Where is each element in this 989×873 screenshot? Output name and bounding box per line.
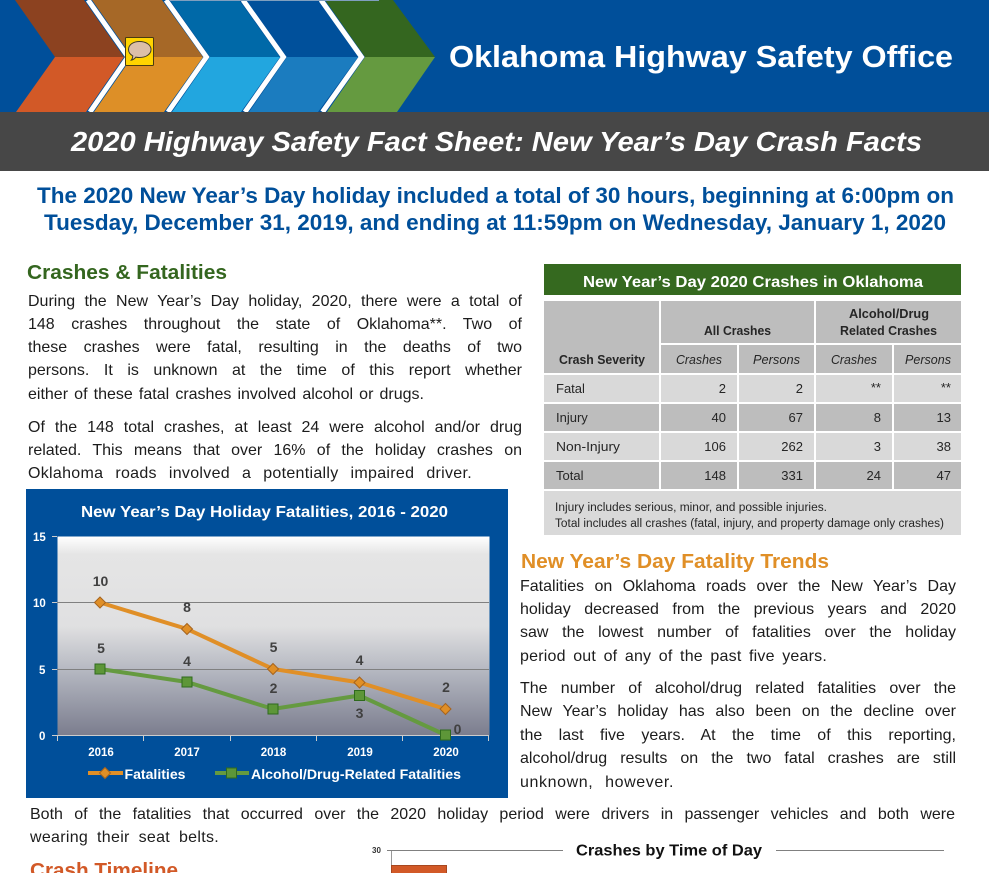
data labels: 8 <box>183 599 191 615</box>
text block: trends paragraph 1 <box>520 578 956 665</box>
header banner <box>0 0 989 112</box>
data labels: 5 <box>270 639 278 655</box>
text block: crashes paragraph 2: related. This means that over 16% of the holiday crashes on <box>28 442 522 459</box>
text block: crashes paragraph 2 <box>28 419 522 482</box>
row: injury: Injury <box>556 410 588 425</box>
subtitle: 2020 Highway Safety Fact Sheet: New Year’s Day Crash Facts <box>70 126 922 157</box>
chart title: Crashes by Time of Day <box>576 842 762 860</box>
text block: crashes paragraph 1: persons. It is unknown at the time of this report whether <box>28 362 522 379</box>
chart: crashes by time of day: 30 <box>372 846 381 855</box>
table footnote: Injury includes serious, minor, and possible injuries. <box>555 502 827 514</box>
subtitle bar <box>0 112 989 171</box>
table column headings <box>559 306 951 367</box>
x axis labels: 2018 <box>261 747 287 759</box>
banner title: Oklahoma Highway Safety Office <box>449 39 953 74</box>
row: injury: 13 <box>937 410 951 425</box>
legend: Fatalities <box>124 766 186 782</box>
panel: fatalities line chart <box>26 489 508 798</box>
text block: trends paragraph 1: Fatalities on Oklahoma roads over the New Year’s Day <box>520 578 956 595</box>
data labels: 5 <box>97 640 105 656</box>
text block: crashes paragraph 1: During the New Year’s Day holiday, 2020, there were a total of <box>28 293 522 310</box>
chevron 4: blue <box>247 0 358 112</box>
table title: New Year’s Day 2020 Crashes in Oklahoma <box>583 274 923 291</box>
table column headings: All Crashes <box>704 323 771 338</box>
table column headings: Related Crashes <box>840 323 937 338</box>
data labels: 4 <box>183 653 191 669</box>
data labels <box>93 573 462 737</box>
row: fatal: Fatal <box>556 381 585 396</box>
row: total: 24 <box>867 468 881 483</box>
chevron 3: cyan <box>170 0 280 112</box>
row: total <box>556 468 951 483</box>
table column headings: Crashes <box>831 352 877 367</box>
row: fatal: 2 <box>719 381 726 396</box>
table column headings: Alcohol/Drug <box>849 306 929 321</box>
x axis labels: 2016 <box>88 747 114 759</box>
row: fatal: ** <box>941 380 951 395</box>
y axis labels: 0 <box>39 731 45 743</box>
data labels: 2 <box>270 680 278 696</box>
chart title: New Year’s Day Holiday Fatalities, 2016 - 2020 <box>81 504 448 521</box>
row: non-injury: 38 <box>937 439 951 454</box>
x axis labels: 2019 <box>347 747 373 759</box>
text block: trends paragraph 2 <box>520 680 956 791</box>
row: fatal <box>556 380 951 396</box>
plot area <box>58 536 490 736</box>
x axis labels <box>88 747 459 759</box>
text block: seat belts note <box>30 806 955 846</box>
table header cells <box>544 301 961 373</box>
text block: seat belts note: Both of the fatalities that occurred over the 2020 holiday period were drivers in passenger vehicles and both were <box>30 806 955 823</box>
data labels: 2 <box>442 679 450 695</box>
text block: trends paragraph 2: alcohol/drug results on the two fatal crashes are still <box>520 750 956 767</box>
data labels: 4 <box>356 652 364 668</box>
table body cells <box>544 375 961 535</box>
x axis labels: 2017 <box>174 747 200 759</box>
table footnote <box>555 502 944 530</box>
text block: crashes paragraph 1: 148 crashes throughout the state of Oklahoma**. Two of <box>28 316 522 333</box>
text block: trends paragraph 2: The number of alcohol/drug related fatalities over the <box>520 680 956 697</box>
table column headings: Persons <box>753 352 800 367</box>
row: total: Total <box>556 468 584 483</box>
icon: comment note <box>126 38 154 66</box>
text block: crashes paragraph 1: either of these fatal crashes involved alcohol or drugs. <box>28 386 424 403</box>
data labels: 10 <box>93 573 108 589</box>
table column headings: Persons <box>905 352 951 367</box>
row: non-injury: 106 <box>704 439 726 454</box>
legend <box>88 766 461 782</box>
y axis labels: 5 <box>39 665 46 677</box>
y axis labels <box>33 532 46 743</box>
chevron 1: orange-red <box>15 0 124 112</box>
chevron 2: amber <box>92 0 203 112</box>
row: injury: 67 <box>789 410 803 425</box>
data labels: 0 <box>454 721 462 737</box>
chart: crashes by time of day <box>372 842 944 873</box>
text block: trends paragraph 2: the last five years. At the time of this reporting, <box>520 727 956 744</box>
row: fatal: ** <box>871 380 881 395</box>
heading: fatality trends: New Year’s Day Fatality Trends <box>521 551 829 573</box>
row: non-injury: 3 <box>874 439 881 454</box>
text block: trends paragraph 2: New Year’s holiday has also been on the decline over <box>520 703 956 720</box>
text block: trends paragraph 1: saw the lowest number of fatalities over the holiday <box>520 624 956 641</box>
intro statement <box>37 183 954 235</box>
row: injury: 8 <box>874 410 881 425</box>
line: fatalities <box>94 597 451 714</box>
row: non-injury: Non-Injury <box>556 439 621 454</box>
text block: trends paragraph 1: holiday decreased from the previous years and 2020 <box>520 601 956 618</box>
row: total: 47 <box>937 468 951 483</box>
text block: crashes paragraph 2: Oklahoma roads involved a potentially impaired driver. <box>28 465 472 482</box>
row: total: 148 <box>704 468 726 483</box>
text block: trends paragraph 1: period out of any of the past five years. <box>520 648 827 665</box>
row: injury: 40 <box>712 410 726 425</box>
row: non-injury <box>556 439 951 454</box>
intro statement: Tuesday, December 31, 2019, and ending at 11:59pm on Wednesday, January 1, 2020 <box>44 210 946 235</box>
y axis labels: 10 <box>33 598 46 610</box>
row: total: 331 <box>781 468 803 483</box>
bar <box>392 866 446 873</box>
line: alcohol/drug-related fatalities <box>95 664 450 740</box>
legend: Alcohol/Drug-Related Fatalities <box>251 766 461 782</box>
data labels: 3 <box>356 705 364 721</box>
row: fatal: 2 <box>796 381 803 396</box>
row: non-injury: 262 <box>781 439 803 454</box>
table column headings: Crashes <box>676 352 722 367</box>
intro statement: The 2020 New Year’s Day holiday included a total of 30 hours, beginning at 6:00pm on <box>37 183 954 208</box>
text block: seat belts note: wearing their seat belts. <box>30 829 219 846</box>
chevron 5: green <box>325 0 435 112</box>
x axis labels: 2020 <box>433 747 459 759</box>
y axis labels: 15 <box>33 532 46 544</box>
text block: crashes paragraph 1 <box>28 293 522 403</box>
table column headings: Crash Severity <box>559 352 646 367</box>
text block: crashes paragraph 2: Of the 148 total crashes, at least 24 were alcohol and/or drug <box>28 419 522 436</box>
text block: crashes paragraph 1: these crashes were fatal, resulting in the deaths of two <box>28 339 522 356</box>
table title <box>544 264 961 295</box>
panel: crashes table <box>544 264 961 535</box>
row: injury <box>556 410 951 425</box>
table footnote: Total includes all crashes (fatal, injury, and property damage only crashes) <box>555 518 944 530</box>
heading: crashes and fatalities: Crashes & Fatalities <box>27 262 227 284</box>
text block: trends paragraph 2: unknown, however. <box>520 774 674 791</box>
